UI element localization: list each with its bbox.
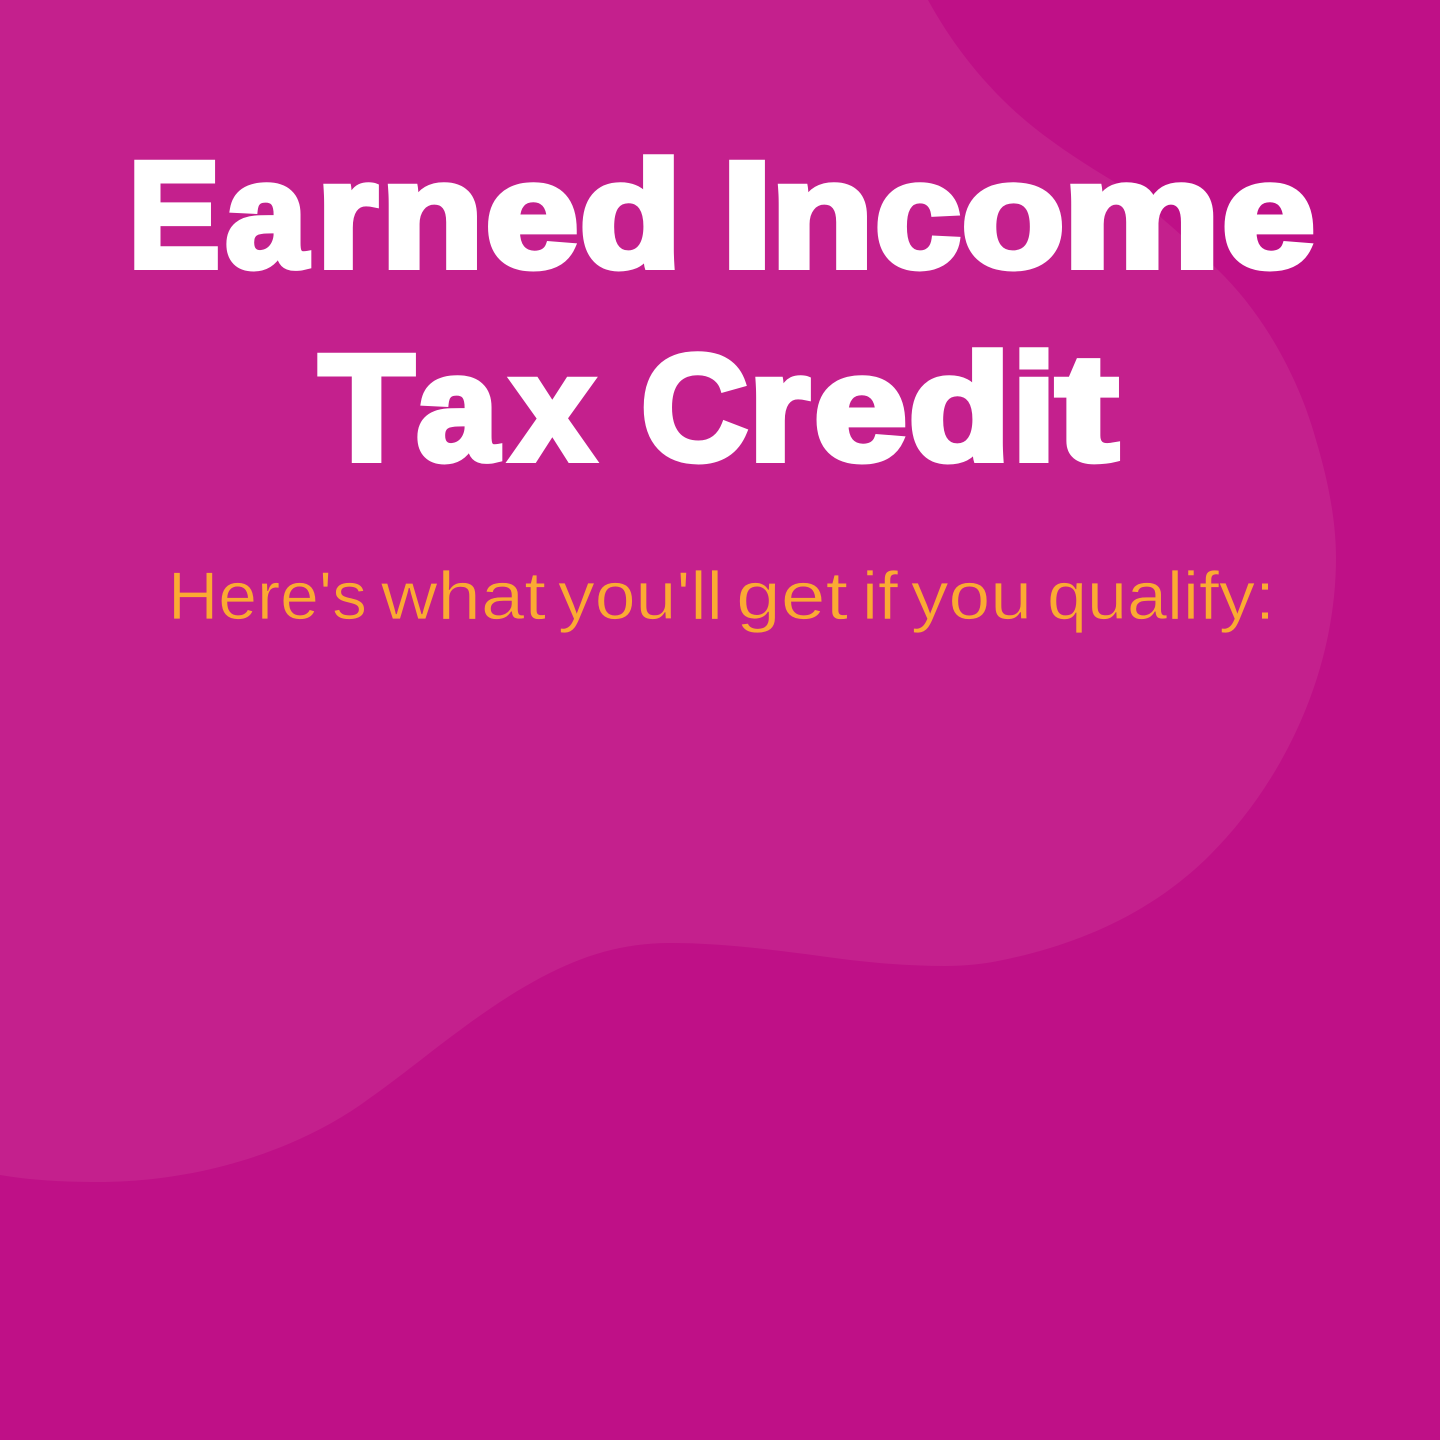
title: e — [485, 130, 579, 298]
title: T — [319, 324, 414, 492]
subtitle: you — [911, 558, 1032, 634]
subtitle: Here's — [168, 558, 367, 634]
subtitle — [168, 558, 1275, 634]
title: x — [511, 324, 594, 492]
title: t — [1056, 324, 1118, 492]
title: a — [226, 130, 309, 298]
subtitle: get — [736, 558, 848, 634]
title: i — [1012, 324, 1056, 492]
title: d — [908, 324, 1011, 492]
title: e — [1222, 130, 1315, 298]
background blob shape — [0, 0, 1336, 1182]
title — [128, 130, 1315, 492]
title: I — [721, 130, 773, 298]
title: o — [961, 130, 1065, 298]
subtitle: what — [380, 558, 546, 634]
title: n — [381, 130, 484, 298]
subtitle: qualify: — [1047, 558, 1275, 634]
title: e — [814, 324, 907, 492]
title: C — [641, 324, 748, 492]
title: n — [771, 130, 874, 298]
title: m — [1063, 130, 1220, 298]
title: a — [416, 324, 500, 492]
title: d — [580, 130, 682, 298]
title: E — [128, 130, 220, 298]
title: r — [749, 324, 810, 492]
subtitle: you'll — [558, 558, 723, 634]
title: r — [317, 130, 378, 298]
subtitle: if — [862, 558, 898, 634]
title: c — [875, 130, 961, 298]
